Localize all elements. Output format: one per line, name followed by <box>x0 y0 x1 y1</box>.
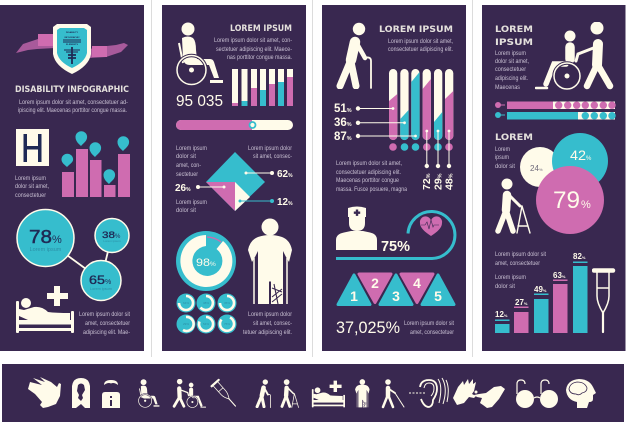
chart: overlapping bubbles: 42 <box>570 147 586 163</box>
bar chart: percentages: 12% <box>495 310 508 319</box>
text block: left: sectetuer <box>176 172 198 178</box>
circle: 65%: 65 <box>89 275 105 287</box>
chart: donut 98% <box>176 231 236 291</box>
chart: numbered triangles: 4 <box>413 275 421 291</box>
text block: left: dolor sit <box>176 154 196 160</box>
icon: hand <box>28 377 61 408</box>
icon: heart <box>420 216 442 236</box>
arrow: teal loop <box>336 212 455 258</box>
number: 95 035 <box>176 93 223 110</box>
icon: crutch <box>594 270 613 332</box>
text block: left: Lorem ipsum <box>176 146 207 152</box>
bar chart: percentages: 63% <box>553 271 566 280</box>
bar chart: percentages <box>495 252 588 333</box>
chart: numbered triangles: 2 <box>371 275 379 291</box>
text block: bed: adipiscing elit. Mae- <box>83 330 130 336</box>
text block: amet, consectetuer <box>495 261 540 267</box>
text block: footer <box>404 321 454 336</box>
chart: overlapping bubbles <box>520 133 608 234</box>
circle: 78%: % <box>52 234 62 246</box>
bar chart: pins <box>62 131 130 197</box>
icon: head silhouette <box>72 378 90 408</box>
text block: left: amet, con- <box>176 163 201 169</box>
heading: LOREM IPSUM <box>379 25 453 35</box>
circle: 78%: Lorem ipsum <box>30 247 62 253</box>
text block: dolor sit amet, <box>495 59 529 65</box>
text block: Lorem ipsum dolor sit amet, con- <box>214 38 292 44</box>
bar chart: percentages: 27% <box>515 298 528 307</box>
label: 72%: 72% <box>421 173 433 190</box>
text block: Lorem ipsum <box>495 51 526 57</box>
bar chart: seven bars <box>232 69 293 106</box>
icon: hospital sign <box>16 129 49 166</box>
text block: nas porttitor congue massa. <box>227 55 292 61</box>
text block: crutches: sit amet, consec- <box>253 321 292 327</box>
text block: crutches <box>243 312 292 336</box>
chart: numbered triangles: 1 <box>350 288 358 304</box>
icon: person with walker <box>498 178 530 233</box>
chart: small donuts: 35% <box>224 301 230 305</box>
chart: numbered triangles: 3 <box>392 288 400 304</box>
text block: intro: ipiscing elit. Maecenas porttitor congue massa. <box>18 108 127 114</box>
icon: ribbon <box>16 34 128 58</box>
chart: overlapping bubbles: % <box>539 167 543 172</box>
heading: LOREM <box>495 25 533 35</box>
text block: dolor sit <box>495 164 515 170</box>
circle: 78% <box>17 210 74 266</box>
text block: right: Lorem ipsum dolor <box>248 146 292 152</box>
text block: hospital: Lorem ipsum <box>15 176 46 182</box>
chart: small donuts <box>176 294 236 334</box>
bar chart: percentages: 49% <box>534 285 547 294</box>
icon: person with info <box>102 380 120 408</box>
icon: shield badge: INFOGRAPHIC <box>64 36 80 39</box>
text block: diamond note: Lorem ipsum <box>176 200 207 206</box>
text block: adipiscing elit. <box>495 76 528 82</box>
text block: elderly note: Lorem ipsum dolor sit amet, <box>336 161 402 167</box>
text block: Lorem ipsum dolor sit <box>495 252 546 258</box>
icon: bed small <box>312 381 345 407</box>
chart: small donuts: 64% <box>183 301 189 305</box>
circle: 65% <box>81 260 121 300</box>
text block: right <box>248 146 292 160</box>
text block: elderly note: massa. Fusce posuere, magna <box>336 187 408 193</box>
icon: pushing wheelchair small <box>174 379 206 408</box>
text block: Maecenas <box>495 85 520 91</box>
label: 12%: 12% <box>277 197 293 208</box>
text block: Lorem ipsum dolor sit amet, <box>388 39 453 45</box>
circle: 38%: Lorem ipsum <box>103 239 121 243</box>
circle: 38%: 38 <box>102 230 115 241</box>
label: 51%: 51% <box>334 103 352 115</box>
panel: introduction <box>0 5 144 351</box>
icon: elderly small <box>257 379 270 408</box>
chart: overlapping bubbles: 79 <box>553 187 580 214</box>
progress bar <box>176 120 293 130</box>
label: 26%: 26% <box>175 183 191 194</box>
label: 48%: 48% <box>444 173 456 190</box>
icon: wheelchair user small <box>139 379 159 407</box>
chart: small donuts: 54% <box>203 322 209 326</box>
text block: ipsum <box>495 155 509 161</box>
heading: LOREM <box>495 133 533 143</box>
heading: DISABILITY INFOGRAPHIC <box>15 85 129 95</box>
text block: Lorem ipsum <box>495 275 526 281</box>
icon: shield badge: DISABILITY <box>66 31 79 34</box>
panel: elderly statistics <box>322 5 466 351</box>
chart: small donuts: 29% <box>183 322 189 326</box>
text block: footer: amet, consectetuer <box>410 330 454 336</box>
heading: IPSUM <box>495 38 533 48</box>
text block <box>388 39 453 53</box>
chart: overlapping bubbles: % <box>586 156 592 162</box>
label: 75%: 75% <box>381 239 410 255</box>
text block: right: sit amet, consec- <box>253 154 292 160</box>
text block: hospital <box>15 176 49 199</box>
icon: blind person <box>383 379 404 407</box>
label: 29%: 29% <box>432 173 444 190</box>
icon: shield badge <box>53 24 91 74</box>
icon: head with brain <box>566 379 596 408</box>
label: 36%: 36% <box>334 117 352 129</box>
heading: LOREM IPSUM <box>230 24 292 34</box>
text block: elderly note <box>336 161 408 193</box>
chart: pill bars <box>356 69 453 168</box>
text block <box>495 252 546 290</box>
text block: intro <box>18 100 128 114</box>
panel: care statistics <box>482 5 626 351</box>
circle: 65%: % <box>105 279 111 286</box>
text block: consectetuer adipiscing elit. <box>388 47 453 53</box>
chart: numbered triangles: 5 <box>434 288 442 304</box>
chart: dotted progress bars <box>495 102 616 120</box>
circle: 65%: Lorem ipsum <box>90 287 112 291</box>
chart: diamond <box>196 152 274 211</box>
icon: wheelchair user <box>177 22 223 84</box>
chart: numbered triangles <box>338 274 454 304</box>
text block: diamond note: dolor sit <box>176 208 196 214</box>
text block: bed <box>79 312 130 336</box>
chart: donut 98%: % <box>210 261 216 268</box>
text block: elderly note: Maecenas porttitor congue <box>336 178 400 184</box>
icon: hospital bed <box>16 286 74 333</box>
text block: elderly note: consectetuer adipiscing elit. <box>336 170 401 176</box>
text block: bed: Lorem ipsum dolor sit <box>79 312 130 318</box>
label: 62%: 62% <box>277 169 293 180</box>
text block: footer: Lorem ipsum dolor sit <box>404 321 454 327</box>
icon: walker small <box>282 379 299 407</box>
icon: nurse <box>336 206 377 250</box>
icon: person on crutches <box>248 218 292 304</box>
icon: person pushing wheelchair <box>536 22 610 89</box>
text block: left <box>176 146 207 178</box>
text block: Lorem <box>495 147 510 153</box>
chart: overlapping bubbles: % <box>581 199 591 211</box>
chart: overlapping bubbles: 24 <box>530 164 540 173</box>
text block: crutches: Lorem ipsum dolor <box>248 312 292 318</box>
chart: small donuts: 75% <box>224 322 230 326</box>
icon: glasses <box>516 380 558 408</box>
icon: crutch small <box>212 380 239 409</box>
circle: 38% <box>95 218 129 252</box>
text block: dolor sit <box>495 284 515 290</box>
text block: sectetuer adipiscing elit. Maece- <box>216 47 292 53</box>
text block <box>495 51 529 91</box>
circle: 78%: 78 <box>29 227 52 247</box>
text block: hospital: consectetuer <box>15 193 46 199</box>
text block: intro: Lorem ipsum dolor sit amet, consectetuer ad- <box>19 100 128 106</box>
icon: crutches small <box>355 379 370 407</box>
circle: 38%: % <box>115 234 121 240</box>
chart: small donuts: 38% <box>203 301 209 305</box>
chart: donut 98%: 98 <box>196 257 210 269</box>
label: 87%: 87% <box>334 131 352 143</box>
text block: crutches: tetuer adipiscing elit. <box>243 330 292 336</box>
icon: elderly person with cane <box>340 23 371 88</box>
panel: icon strip <box>2 364 624 422</box>
text block: bed: amet, consectetuer <box>85 321 130 327</box>
text block: diamond note <box>176 200 207 214</box>
heading <box>495 25 533 48</box>
text block: hospital: dolor sit amet, <box>15 184 49 190</box>
icon: shield badge: ELEMENTS <box>66 44 78 46</box>
chart: linked percentage circles <box>17 210 129 300</box>
number: 37,025% <box>336 318 400 337</box>
icon: ear <box>409 378 448 407</box>
panel: wheelchair statistics <box>162 5 306 351</box>
bar chart: percentages: 82% <box>573 252 586 261</box>
text block <box>214 38 292 61</box>
icon: sign language hands <box>453 379 505 408</box>
text block: consectetuer <box>495 67 526 73</box>
text block <box>495 147 515 170</box>
